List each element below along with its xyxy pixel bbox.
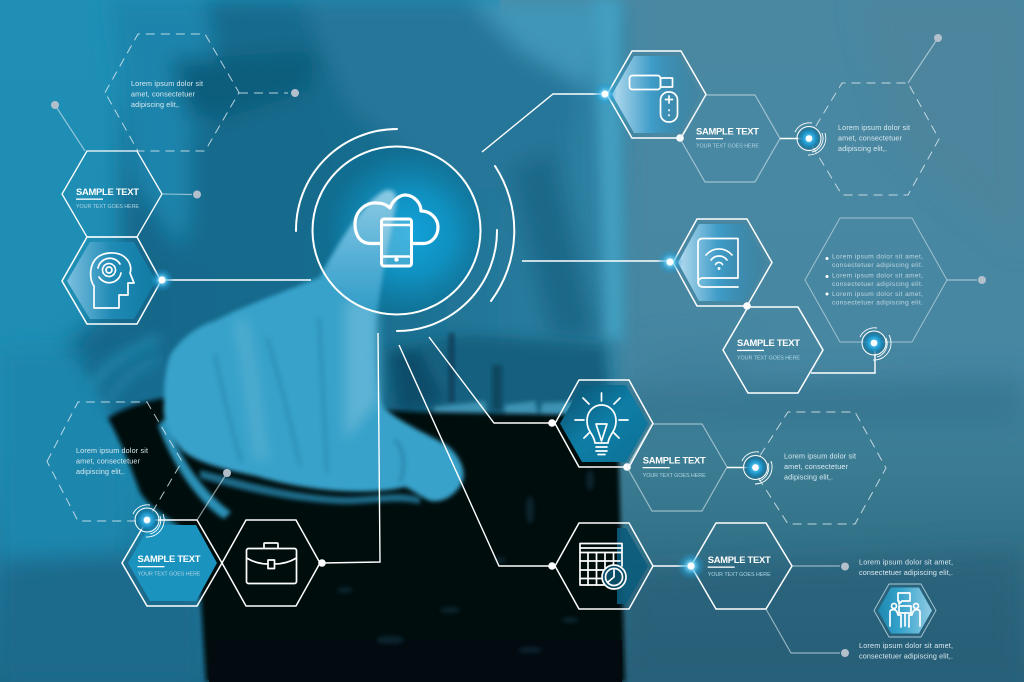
- body text: Lorem ipsum dolor sit: [838, 123, 910, 132]
- glow node: [150, 268, 174, 292]
- panel: bullet list hexagon: [805, 218, 986, 360]
- connectors: [766, 562, 849, 657]
- target node: [860, 328, 891, 360]
- body text: amet, consectetuer: [838, 134, 903, 142]
- dashed connector: [239, 89, 299, 97]
- black torso: [108, 398, 625, 682]
- connector: [197, 469, 231, 520]
- node: [548, 419, 556, 427]
- body text: amet, consectetuer: [131, 90, 196, 98]
- panel: USB hexagon: [593, 51, 706, 142]
- connector lines from hub: [162, 94, 670, 566]
- body text: amet, consectetuer: [76, 456, 141, 466]
- icon: briefcase: [246, 543, 296, 584]
- panel: light bulb hexagon: [548, 380, 653, 471]
- bullet text: [826, 254, 923, 306]
- target node: [795, 123, 826, 155]
- panel: bottom right sample text hexagon: [677, 523, 849, 657]
- glow node: [677, 552, 705, 580]
- heading: [708, 554, 771, 578]
- heading: SAMPLE TEXT: [696, 126, 759, 136]
- heading: [643, 454, 706, 479]
- upper text: Lorem ipsum dolor sit amet,: [859, 558, 953, 566]
- glow node: [593, 82, 617, 106]
- icon: head with gear: [91, 253, 134, 308]
- heading: YOUR TEXT GOES HERE: [138, 572, 201, 578]
- panel: top left info hexagon: [105, 34, 299, 151]
- connector: [947, 276, 986, 284]
- city silhouette: [385, 335, 612, 418]
- body text: adipiscing elit,.: [838, 144, 887, 153]
- heading: [696, 126, 759, 150]
- connectors: [51, 101, 201, 198]
- heading: YOUR TEXT GOES HERE: [643, 473, 706, 479]
- panel: bottom left info hexagon: [47, 402, 182, 521]
- bullet text: consectetuer adipiscing elit.: [832, 281, 923, 288]
- panel: book wifi hexagon: [657, 219, 772, 310]
- heading: YOUR TEXT GOES HERE: [76, 204, 139, 210]
- panel: briefcase hexagon: [222, 520, 326, 606]
- icon: calendar with clock: [580, 544, 626, 589]
- bullet text: Lorem ipsum dolor sit amet,: [832, 291, 923, 298]
- body text: adipiscing elit,.: [784, 472, 833, 482]
- target node: [742, 452, 772, 484]
- connector: [908, 34, 942, 83]
- panel: right sample text hexagon: [723, 307, 875, 393]
- node: [318, 559, 326, 567]
- icon: usb and remote: [630, 76, 678, 122]
- lower text: Lorem ipsum dolor sit amet,: [859, 641, 953, 650]
- panel: left sample text hexagon: [51, 101, 201, 237]
- glow node: [657, 249, 683, 275]
- heading: [737, 337, 800, 362]
- panel: calendar hexagon: [548, 523, 691, 609]
- icon: light bulb: [575, 393, 628, 454]
- heading: YOUR TEXT GOES HERE: [696, 144, 759, 150]
- body text: adipiscing elit,.: [131, 100, 180, 109]
- bullet text: Lorem ipsum dolor sit amet,: [832, 272, 923, 280]
- heading: SAMPLE TEXT: [708, 554, 771, 565]
- heading: YOUR TEXT GOES HERE: [708, 572, 771, 578]
- panel: top right info hexagon: [795, 34, 942, 195]
- panel: mid right sample text hexagon: [627, 424, 755, 511]
- icon: cloud with phone: [355, 195, 438, 266]
- heading: SAMPLE TEXT: [643, 454, 706, 466]
- icon: wifi book: [698, 238, 738, 287]
- heading: [76, 186, 139, 210]
- panel: bottom left sample text hexagon: [122, 469, 231, 606]
- heading: SAMPLE TEXT: [737, 337, 800, 348]
- panel: head icon hexagon: [62, 237, 174, 324]
- team icon hexagon: [874, 584, 936, 637]
- panel: mid right info hexagon: [742, 412, 886, 524]
- body text: Lorem ipsum dolor sit: [76, 446, 148, 455]
- panel: central cloud hub: [296, 129, 514, 331]
- bullet text: consectetuer adipiscing elit.: [832, 262, 923, 269]
- heading: [138, 553, 201, 578]
- speckles in torso: [337, 470, 594, 653]
- body text: Lorem ipsum dolor sit: [131, 79, 203, 88]
- body text: amet, consectetuer: [784, 462, 849, 471]
- heading: YOUR TEXT GOES HERE: [737, 356, 800, 362]
- body text: adipiscing elit,.: [76, 467, 125, 476]
- body text: Lorem ipsum dolor sit: [784, 452, 856, 460]
- outer arcs: [296, 129, 514, 331]
- bullet text: Lorem ipsum dolor sit amet,: [832, 254, 923, 260]
- heading: SAMPLE TEXT: [76, 186, 139, 197]
- bullet text: consectetuer adipiscing elit.: [832, 300, 923, 306]
- hand: [158, 190, 464, 519]
- panel: bottom right text and team icon: [859, 558, 953, 660]
- heading: SAMPLE TEXT: [138, 553, 201, 564]
- panel: top right sample text hexagon: [680, 95, 808, 182]
- lower text: consectetuer adipiscing elit,.: [859, 652, 953, 660]
- nodes: [548, 562, 556, 570]
- upper text: consectetuer adipiscing elit,.: [859, 568, 953, 577]
- target node: [133, 505, 164, 537]
